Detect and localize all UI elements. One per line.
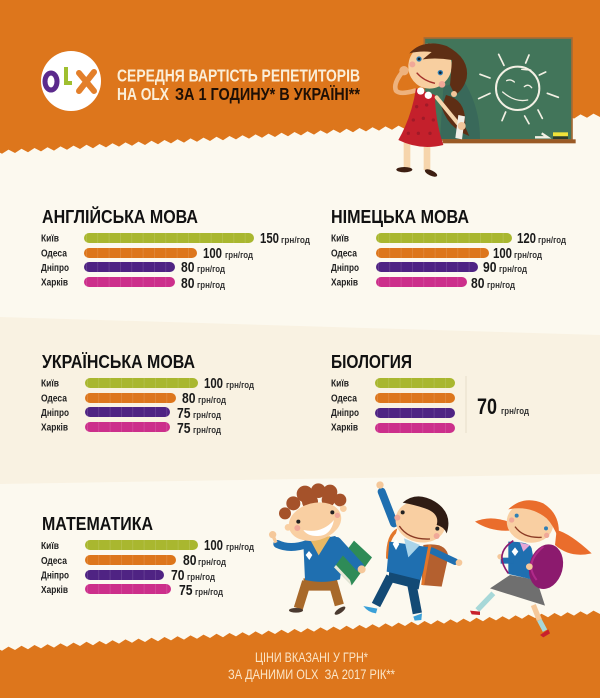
row: Дніпро 75: грн/год <box>193 410 221 421</box>
row: Харків 80 <box>41 276 225 292</box>
row: Одеса 100: Одеса <box>331 248 357 260</box>
row: Київ 100: 100 <box>204 376 223 392</box>
row: Дніпро 70 <box>41 568 215 584</box>
panel: Англійська мова <box>41 206 310 292</box>
row: Київ 120 <box>331 231 566 247</box>
footer note <box>228 649 395 682</box>
illustration: girl at blackboard <box>395 38 576 178</box>
icon: OLX logo <box>41 51 101 111</box>
row: Дніпро 90: 90 <box>483 260 496 276</box>
row: Одеса 100 <box>331 246 542 262</box>
background band <box>0 317 600 484</box>
value: 70 грн/год: 70 <box>477 394 497 419</box>
row: Дніпро 70: Дніпро <box>41 570 69 582</box>
chalk sun <box>479 54 558 124</box>
row: Київ 150: грн/год <box>281 235 310 246</box>
row: Київ 120: грн/год <box>538 235 566 246</box>
title <box>117 66 360 104</box>
panel: Німецька мова <box>331 207 566 292</box>
blackboard <box>424 38 576 143</box>
row: Київ 120: 120 <box>517 231 536 247</box>
heading: УКРАЇНСЬКА МОВА <box>42 352 195 372</box>
row: Дніпро 90: грн/год <box>499 264 527 275</box>
row: Дніпро 80: грн/год <box>197 264 225 275</box>
footer note: ЦІНИ ВКАЗАНІ У ГРН* <box>255 649 368 665</box>
row: Харків 75: Харків <box>41 422 68 434</box>
row: Дніпро 70: грн/год <box>187 572 215 583</box>
boy with books <box>269 483 372 616</box>
row: Харків 75: грн/год <box>193 425 221 436</box>
row: Дніпро: Дніпро <box>331 407 359 419</box>
heading: БІОЛОГИЯ <box>331 352 412 372</box>
illustration: three schoolchildren <box>269 481 592 637</box>
row: Одеса 100: 100 <box>203 246 222 262</box>
row: Дніпро 80 <box>41 260 225 276</box>
row: Одеса 100: грн/год <box>225 250 253 261</box>
row: Одеса 100: 100 <box>493 246 512 262</box>
value: 70 грн/год: грн/год <box>501 406 529 417</box>
row: Дніпро 80: 80 <box>181 260 194 276</box>
row: Дніпро 75: 75 <box>177 406 190 422</box>
row: Одеса 100: Одеса <box>41 248 67 260</box>
row: Одеса 80 <box>41 553 226 569</box>
heading: АНГЛІЙСЬКА МОВА <box>42 206 198 227</box>
row: Одеса 80: грн/год <box>198 557 226 568</box>
row: Одеса 80: Одеса <box>41 392 67 404</box>
row: Харків 75 <box>41 421 221 437</box>
title: СЕРЕДНЯ ВАРТІСТЬ РЕПЕТИТОРІВ <box>117 66 360 86</box>
row: Київ 100: Київ <box>41 378 59 390</box>
row: Харків 80: Харків <box>331 276 358 288</box>
row: Одеса 80: 80 <box>183 553 196 569</box>
row: Одеса: Одеса <box>331 392 357 404</box>
row: Київ 150: Київ <box>41 232 59 244</box>
row: Харків 75: 75 <box>179 583 192 599</box>
row: Харків: Харків <box>331 422 358 434</box>
row: Київ 100: Київ <box>41 540 59 552</box>
row: Одеса 80: грн/год <box>198 395 226 406</box>
heading: МАТЕМАТИКА <box>42 514 153 534</box>
row: Дніпро 90: Дніпро <box>331 262 359 274</box>
row: Харків 80: грн/год <box>197 280 225 291</box>
row: Одеса 80: Одеса <box>41 555 67 567</box>
row: Харків 80 <box>331 276 515 292</box>
row: Київ 150: 150 <box>260 231 279 247</box>
row: Харків 75: 75 <box>177 421 190 437</box>
row: Київ 120: Київ <box>331 232 349 244</box>
row: Дніпро 70: 70 <box>171 568 184 584</box>
row: Одеса <box>331 392 455 404</box>
row: Київ 150 <box>41 231 310 247</box>
row: Київ 100: грн/год <box>226 380 254 391</box>
row: Одеса 100: грн/год <box>514 250 542 261</box>
row: Харків 80: 80 <box>181 276 194 292</box>
panel: Біологія <box>331 352 529 434</box>
row: Дніпро <box>331 407 455 419</box>
row: Харків 75 <box>41 583 223 599</box>
heading: НІМЕЦЬКА МОВА <box>331 207 469 227</box>
row: Харків 80: грн/год <box>487 280 515 291</box>
row: Дніпро 80: Дніпро <box>41 262 69 274</box>
row: Київ: Київ <box>331 378 349 390</box>
footer note: ЗА ДАНИМИ OLX ЗА 2017 РІК** <box>228 666 395 682</box>
row: Харків <box>331 422 455 434</box>
girl <box>395 38 469 178</box>
row: Київ 100 <box>41 538 254 554</box>
row: Харків 80: 80 <box>471 276 484 292</box>
title: ЗА 1 ГОДИНУ* В УКРАЇНІ** <box>175 84 360 104</box>
panel: Українська мова <box>41 352 254 437</box>
row: Харків 75: Харків <box>41 584 68 596</box>
row: Київ 100: грн/год <box>226 542 254 553</box>
girl with backpack <box>470 499 592 637</box>
title: НА OLX <box>117 84 169 104</box>
row: Харків 80: Харків <box>41 276 68 288</box>
row: Київ 100 <box>41 376 254 392</box>
value: 70 грн/год <box>477 394 529 419</box>
row: Харків 75: грн/год <box>195 587 223 598</box>
row: Одеса 100 <box>41 246 253 262</box>
row: Дніпро 90 <box>331 260 527 276</box>
panel: Математика <box>41 514 254 599</box>
row: Дніпро 75: Дніпро <box>41 407 69 419</box>
row: Дніпро 75 <box>41 406 221 422</box>
top orange banner <box>0 0 600 155</box>
row: Одеса 80: 80 <box>182 391 196 407</box>
row: Київ 100: 100 <box>204 538 223 554</box>
boy with backpack <box>363 481 462 621</box>
row: Київ <box>331 378 455 390</box>
row: Одеса 80 <box>41 391 226 407</box>
bottom orange banner <box>0 611 600 698</box>
